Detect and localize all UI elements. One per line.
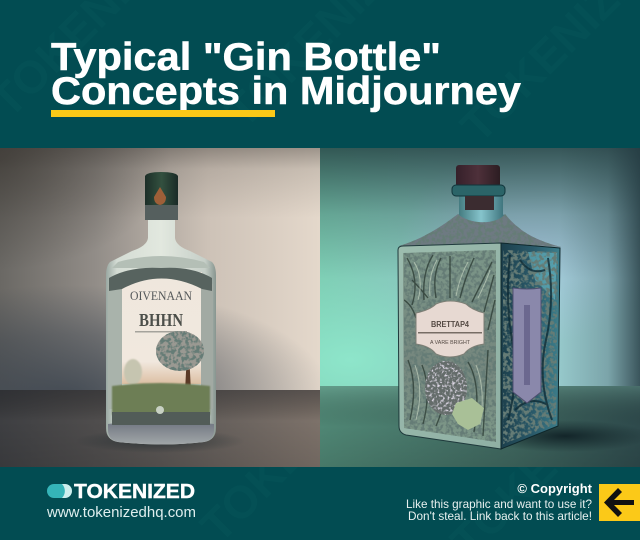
website url: www.tokenizedhq.com: [46, 504, 196, 521]
front label: BRETTAP4: [431, 320, 469, 329]
bottle body: [106, 220, 216, 444]
bottle neck: [452, 196, 510, 224]
title: Concepts in Midjourney: [51, 70, 521, 113]
bottle front face: [398, 243, 501, 449]
label banner: [109, 268, 212, 291]
side face highlight: [528, 252, 557, 300]
copyright notice: Like this graphic and want to use it?: [406, 497, 592, 511]
tree illustration: [124, 331, 204, 386]
bottle side face: [501, 243, 560, 449]
photo backdrop left: [0, 148, 320, 467]
copyright notice: Don't steal. Link back to this article!: [408, 509, 592, 523]
logo mark: [47, 484, 72, 498]
photo: teal engraved gin bottle: [320, 148, 640, 467]
bottle label: BHHN: [139, 310, 183, 330]
footer logo: TOKENIZED: TOKENIZED: [74, 481, 195, 503]
copyright notice: © Copyright: [517, 481, 593, 496]
copyright notice: [406, 481, 593, 523]
bottle label: [108, 268, 213, 425]
bottle cap: [145, 172, 178, 220]
bottle cork: [452, 165, 505, 210]
bottle shoulder shading: [112, 256, 210, 268]
bottle shoulder: [399, 214, 561, 247]
label text: OIVENAAN: [130, 288, 193, 303]
title: [51, 36, 521, 113]
botanical engraving: [403, 250, 497, 443]
arrow icon: [604, 488, 634, 517]
title underline: [51, 110, 275, 117]
title: Typical "Gin Bottle": [51, 36, 441, 79]
bottle base: [108, 421, 214, 444]
front label: A VARE BRIGHT: [430, 340, 471, 346]
bottle inner panel: [403, 250, 496, 442]
photo: clear gin bottle with tree label: [0, 148, 320, 467]
side face foliage: [503, 250, 558, 444]
yellow arrow button: [599, 484, 640, 521]
photo backdrop right: [320, 148, 640, 467]
flower cluster: [424, 360, 468, 416]
footer logo: TOKENIZED: [46, 481, 196, 521]
front label: [416, 301, 484, 357]
plaque lettering: [524, 305, 530, 385]
side panel plaque: [513, 288, 541, 403]
leaf: [452, 398, 484, 430]
